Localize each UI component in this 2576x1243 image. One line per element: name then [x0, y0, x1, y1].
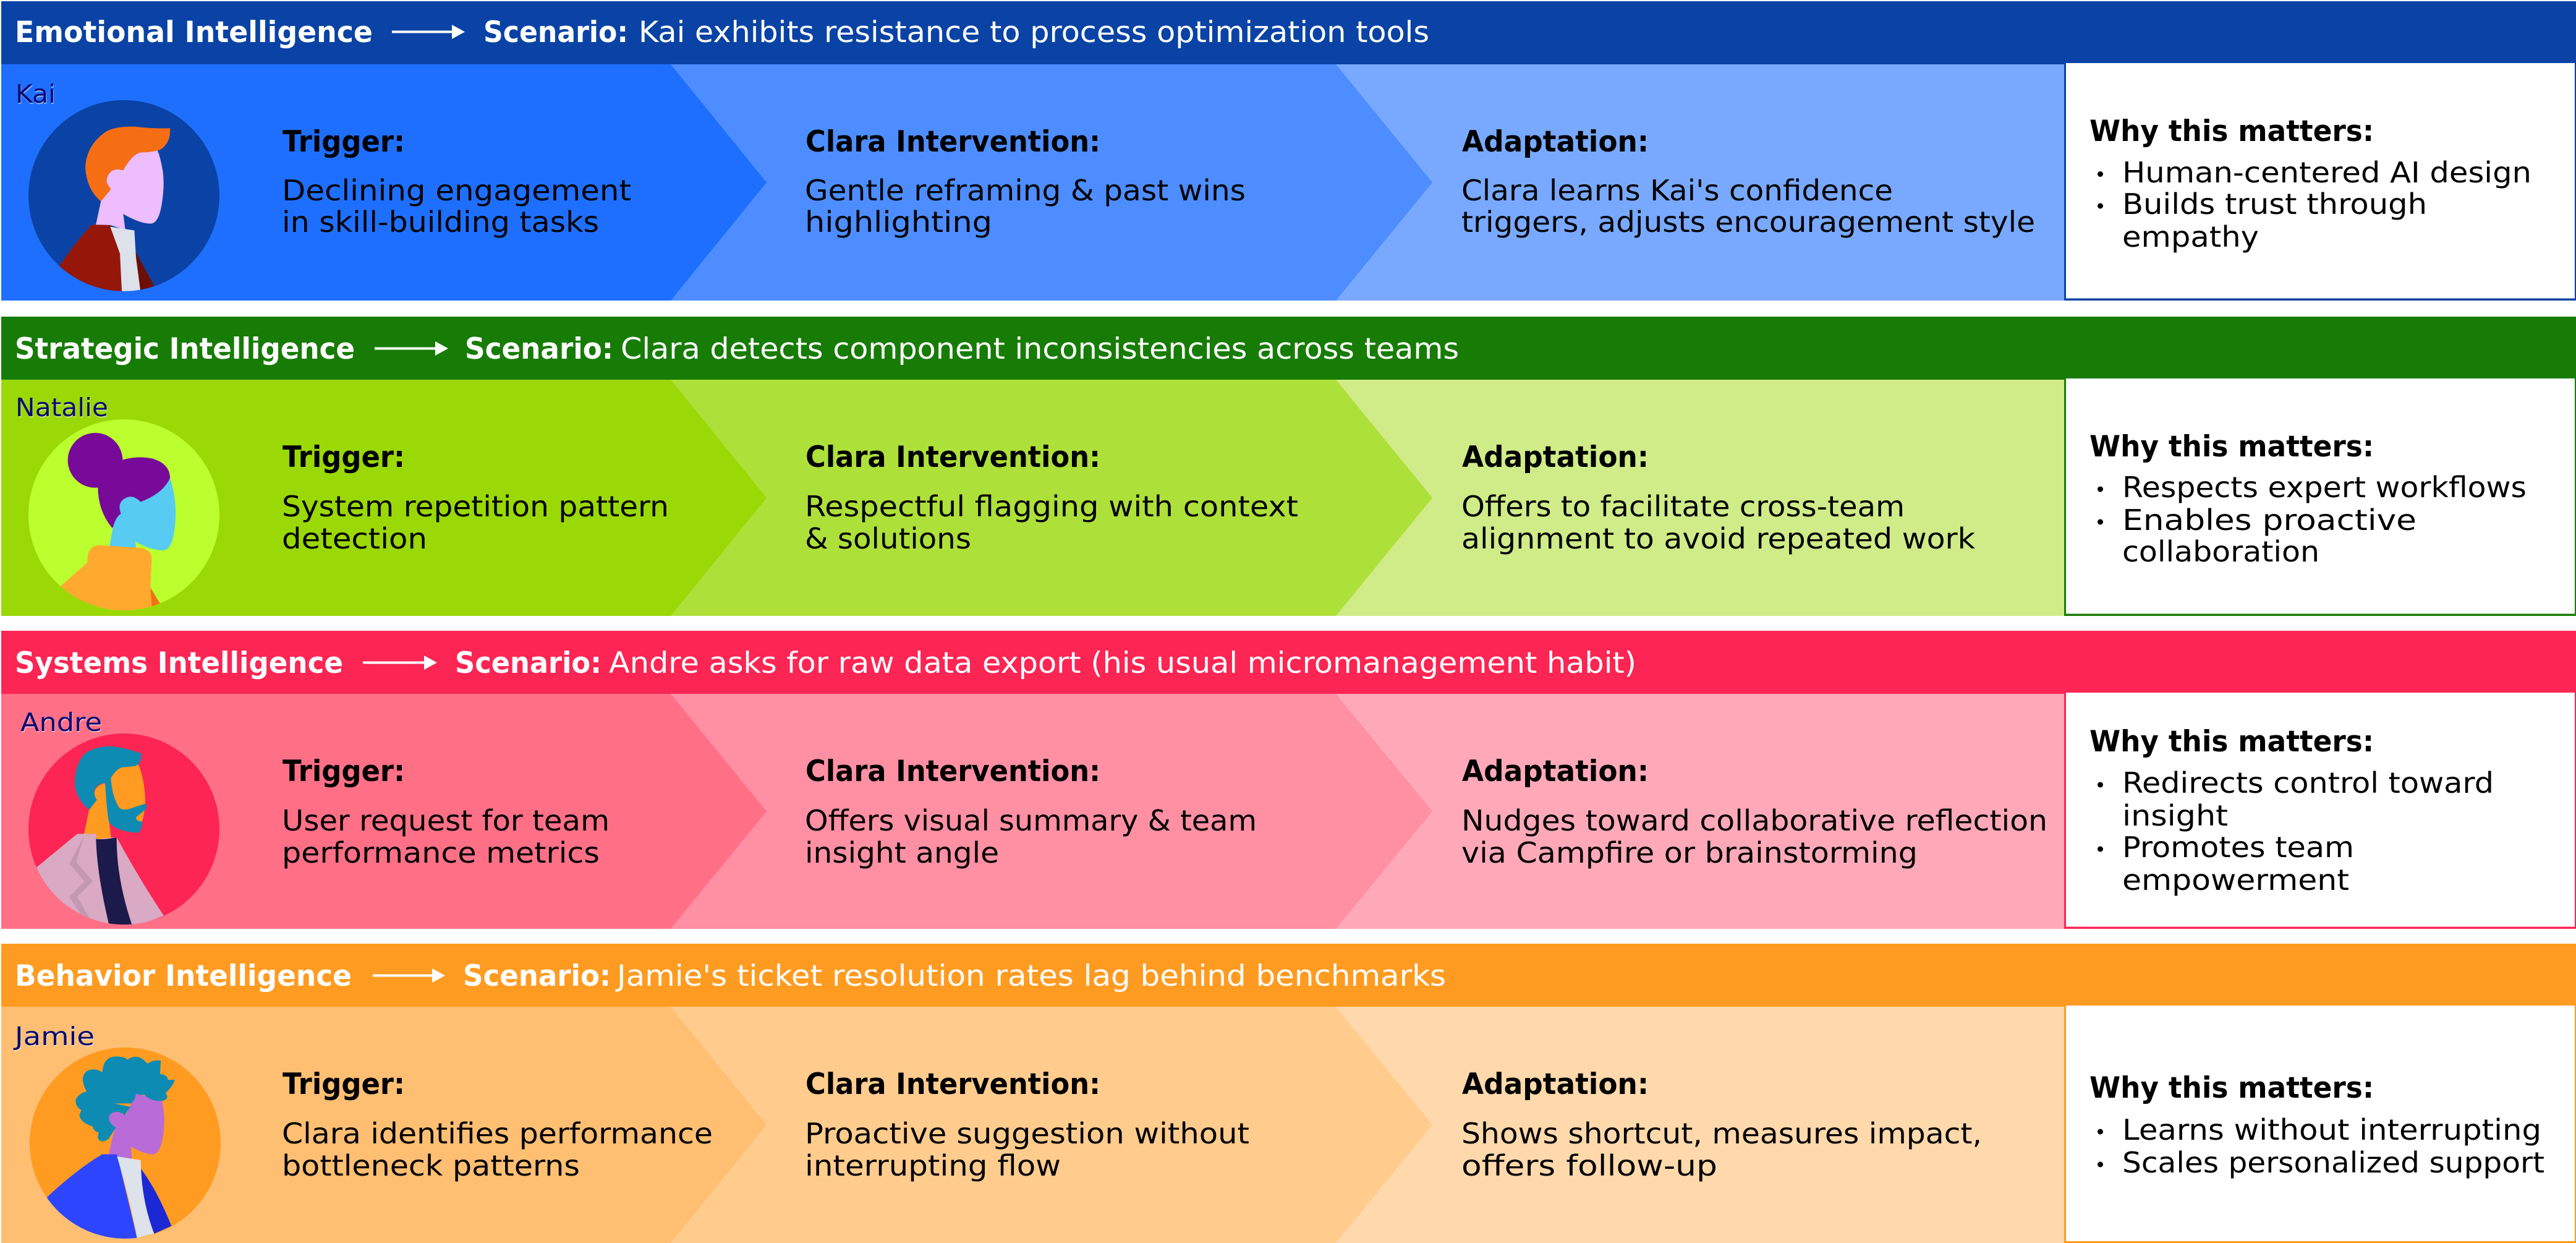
scenario label: Scenario:: [463, 959, 611, 993]
callout: why this matters: Redirects control toward: [2122, 766, 2494, 800]
text block: Adaptation: [1461, 125, 2035, 239]
panel: Strategic Intelligence row: [1, 317, 2576, 616]
text block: Trigger: Trigger:: [283, 440, 405, 474]
text block: Trigger: User request for team: [282, 804, 610, 837]
text block: Clara Intervention: Offers visual summary & team: [805, 804, 1257, 837]
text block: Adaptation: offers follow-up: [1461, 1149, 1717, 1182]
callout: why this matters: [2064, 691, 2576, 929]
header band: Systems Intelligence: [1, 631, 2576, 694]
text block: Trigger: Declining engagement: [282, 174, 631, 207]
text block: Trigger: Trigger:: [283, 1067, 405, 1101]
panel: Systems Intelligence row: [1, 631, 2576, 929]
text block: Clara Intervention: [805, 754, 1257, 869]
text block: Trigger: bottleneck patterns: [282, 1149, 580, 1182]
icon: Jamie avatar: [30, 1048, 221, 1243]
arrow: [373, 968, 445, 983]
persona label: Natalie: Natalie: [15, 393, 108, 422]
chevron band: [1, 380, 2064, 616]
callout: why this matters: Why this matters:: [2089, 430, 2374, 464]
header band: Strategic Intelligence: [1, 317, 2576, 380]
text block: Trigger: [282, 1067, 713, 1182]
callout: why this matters: collaboration: [2122, 535, 2319, 568]
callout: why this matters: Why this matters:: [2089, 725, 2374, 759]
text block: Clara Intervention: Gentle reframing & past wins: [805, 174, 1246, 207]
scenario text: Andre asks for raw data export (his usual micromanagement habit): [609, 646, 1636, 680]
scenario label: Scenario:: [455, 646, 601, 680]
text block: Adaptation: [1461, 440, 1975, 555]
text block: Trigger: [282, 125, 631, 239]
text block: Clara Intervention: Respectful flagging with context: [805, 490, 1298, 523]
chevron band: [1, 64, 2064, 301]
text block: Clara Intervention: highlighting: [805, 205, 992, 239]
chevron band: [1, 694, 2064, 929]
text block: Trigger: [282, 754, 610, 869]
text block: Adaptation: triggers, adjusts encouragement style: [1461, 205, 2035, 239]
text block: Clara Intervention: & solutions: [805, 522, 971, 555]
heading: Emotional Intelligence: Emotional Intelligence: [15, 15, 373, 49]
header band: Behavior Intelligence: [1, 944, 2576, 1007]
heading: Behavior Intelligence: Behavior Intelligence: [15, 959, 352, 993]
panel: Emotional Intelligence row: [1, 1, 2576, 301]
text block: Clara Intervention: Proactive suggestion without: [805, 1117, 1249, 1150]
text block: Trigger: System repetition pattern: [282, 490, 669, 523]
text block: Trigger: Clara identifies performance: [282, 1117, 713, 1150]
text block: Clara Intervention: [805, 440, 1298, 555]
chevron band: [1, 1007, 2064, 1243]
icon: Kai avatar: [28, 100, 219, 295]
scenario label: Scenario:: [465, 332, 613, 366]
callout: why this matters: Promotes team: [2122, 831, 2354, 864]
text block: Clara Intervention: [805, 1067, 1249, 1182]
callout: why this matters: Scales personalized support: [2122, 1146, 2544, 1179]
text block: Trigger: performance metrics: [282, 836, 600, 869]
callout: why this matters: insight: [2122, 799, 2228, 832]
scenario label: Scenario:: [483, 15, 628, 49]
callout: why this matters: [2064, 377, 2576, 616]
text block: Trigger: [282, 440, 669, 555]
callout: why this matters: Human-centered AI design: [2122, 156, 2531, 189]
callout: why this matters: empathy: [2122, 220, 2259, 254]
callout: why this matters: Why this matters:: [2089, 1071, 2374, 1105]
text block: Adaptation: [1461, 1067, 1982, 1182]
text block: Clara Intervention: interrupting flow: [805, 1149, 1061, 1182]
text block: Clara Intervention: [805, 125, 1246, 239]
callout: why this matters: Enables proactive: [2122, 503, 2417, 537]
text block: Trigger: Trigger:: [283, 754, 405, 788]
heading: Systems Intelligence: Systems Intelligence: [15, 646, 343, 680]
arrow: [375, 341, 448, 356]
panel: Behavior Intelligence row: [1, 944, 2576, 1243]
callout: why this matters: Why this matters:: [2089, 114, 2374, 148]
text block: Adaptation: Adaptation:: [1462, 440, 1649, 474]
scenario text: Kai exhibits resistance to process optimization tools: [639, 15, 1429, 49]
text block: Clara Intervention: Clara Intervention:: [806, 754, 1100, 788]
text block: Adaptation: [1461, 754, 2047, 869]
text block: Adaptation: Shows shortcut, measures impact,: [1461, 1117, 1982, 1150]
callout: why this matters: [2064, 62, 2576, 301]
persona label: Kai: Kai: [15, 79, 56, 109]
callout: why this matters: Builds trust through: [2122, 187, 2427, 221]
text block: Adaptation: Nudges toward collaborative reflection: [1461, 804, 2047, 837]
text block: Clara Intervention: Clara Intervention:: [806, 125, 1100, 159]
text block: Trigger: detection: [282, 522, 427, 555]
icon: Andre avatar: [28, 733, 219, 928]
text block: Trigger: in skill-building tasks: [282, 205, 599, 239]
scenario text: Clara detects component inconsistencies across teams: [621, 332, 1459, 366]
header band: Emotional Intelligence: [1, 1, 2576, 64]
callout: why this matters: empowerment: [2122, 863, 2349, 897]
text block: Adaptation: alignment to avoid repeated work: [1461, 522, 1975, 555]
scenario text: Jamie's ticket resolution rates lag behind benchmarks: [615, 959, 1446, 993]
arrow: [363, 656, 437, 670]
icon: Natalie avatar: [28, 419, 219, 612]
text block: Adaptation: Adaptation:: [1462, 754, 1649, 788]
text block: Clara Intervention: Clara Intervention:: [806, 440, 1100, 474]
callout: why this matters: Respects expert workflows: [2122, 471, 2527, 504]
callout: why this matters: [2064, 1004, 2576, 1243]
text block: Adaptation: Clara learns Kai's confidence: [1461, 174, 1893, 207]
persona label: Andre: Andre: [20, 707, 102, 737]
text block: Adaptation: Offers to facilitate cross-team: [1461, 490, 1905, 523]
text block: Trigger: Trigger:: [283, 125, 405, 159]
text block: Clara Intervention: Clara Intervention:: [806, 1067, 1100, 1101]
text block: Adaptation: Adaptation:: [1462, 1067, 1649, 1101]
text block: Adaptation: via Campfire or brainstorming: [1461, 836, 1918, 869]
callout: why this matters: Learns without interrupting: [2122, 1113, 2541, 1147]
arrow: [392, 25, 465, 39]
heading: Strategic Intelligence: Strategic Intelligence: [15, 332, 355, 366]
text block: Clara Intervention: insight angle: [805, 836, 999, 869]
text block: Adaptation: Adaptation:: [1462, 125, 1649, 159]
persona label: Jamie: Jamie: [13, 1022, 95, 1051]
